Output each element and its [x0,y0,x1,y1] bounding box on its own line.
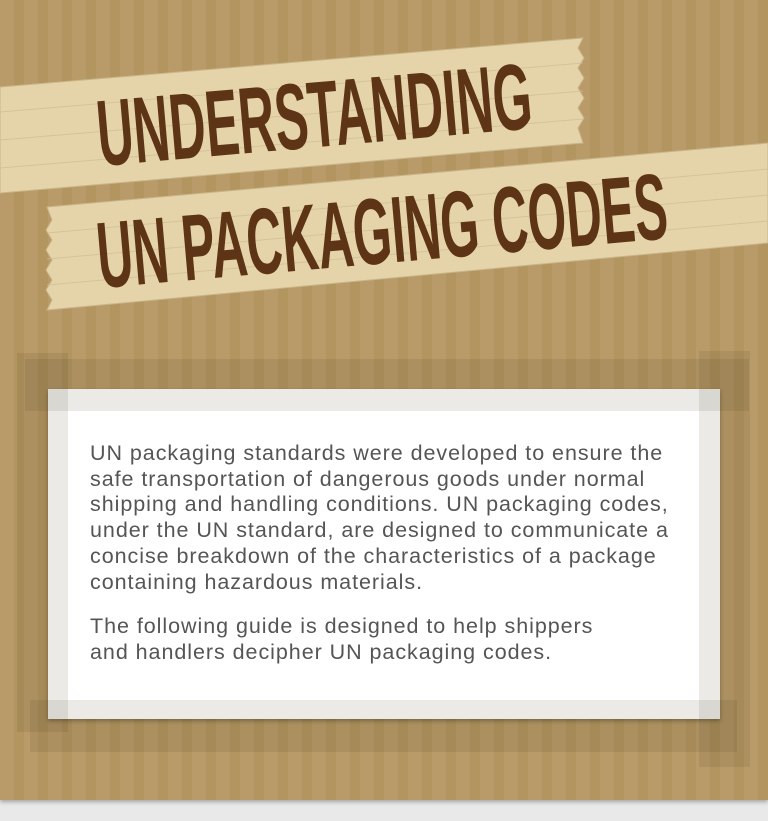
intro paragraph: under the UN standard, are designed to communicate a [90,518,669,542]
intro paragraph: concise breakdown of the characteristics of a package [90,544,657,568]
intro paragraph [90,441,669,594]
tape strips [25,359,749,411]
intro card [48,389,720,719]
intro paragraph: UN packaging standards were developed to ensure the [90,441,663,465]
intro paragraph: shipping and handling conditions. UN packaging codes, [90,492,669,516]
guide paragraph: and handlers decipher UN packaging codes. [90,640,552,664]
intro paragraph: containing hazardous materials. [90,570,423,594]
banner: understanding [0,38,584,193]
title banners [0,38,768,310]
guide paragraph: The following guide is designed to help shippers [90,614,593,638]
intro paragraph: safe transportation of dangerous goods under normal [90,467,645,491]
guide paragraph [90,614,593,664]
